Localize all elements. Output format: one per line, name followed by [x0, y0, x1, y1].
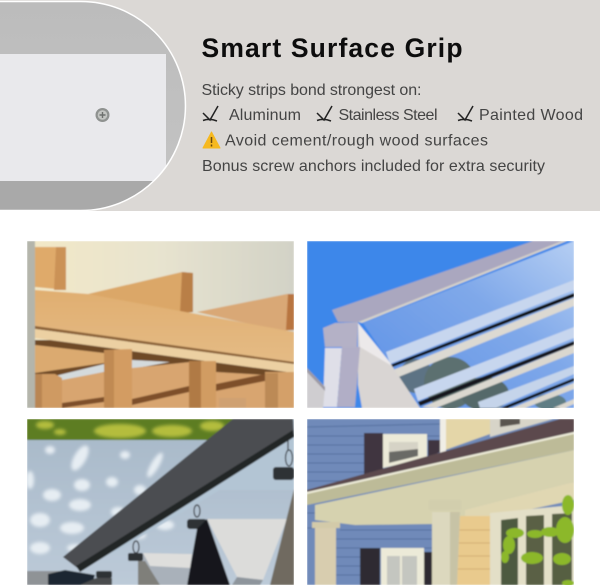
icon: warning triangle — [203, 132, 220, 148]
photo: wooden pergola — [27, 241, 294, 408]
photo: white aluminum pergola with glass roof — [307, 241, 574, 411]
tree reflection — [399, 357, 566, 411]
icon: check painted wood — [458, 106, 473, 121]
hangers — [96, 467, 294, 578]
label: aluminum: Aluminum — [229, 107, 301, 124]
text: warning: Avoid cement/rough wood surfaces — [225, 132, 488, 150]
warning line — [203, 132, 488, 150]
text: intro line: Sticky strips bond strongest on: — [202, 82, 422, 99]
text: bonus anchors: Bonus screw anchors included for extra security — [202, 158, 545, 175]
icon: screw — [96, 108, 110, 122]
photo: house with porch and blue siding — [307, 419, 574, 586]
upper window — [364, 433, 440, 475]
siding lines — [307, 424, 440, 575]
list: suitable materials — [203, 106, 583, 124]
panel: strip with screw close-up — [0, 0, 190, 212]
porch columns — [311, 512, 460, 585]
lower window — [360, 548, 432, 585]
icon: check aluminum — [203, 106, 218, 121]
green leaves — [501, 495, 574, 586]
dappled light — [26, 443, 174, 554]
photo: dark pergola rail with shade canopy — [26, 419, 294, 585]
icon: check stainless steel — [317, 106, 332, 121]
top panel background — [0, 0, 600, 211]
label: stainless steel: Stainless Steel — [338, 107, 438, 124]
label: painted wood: Painted Wood — [479, 107, 583, 124]
title: Smart Surface Grip — [202, 33, 462, 63]
